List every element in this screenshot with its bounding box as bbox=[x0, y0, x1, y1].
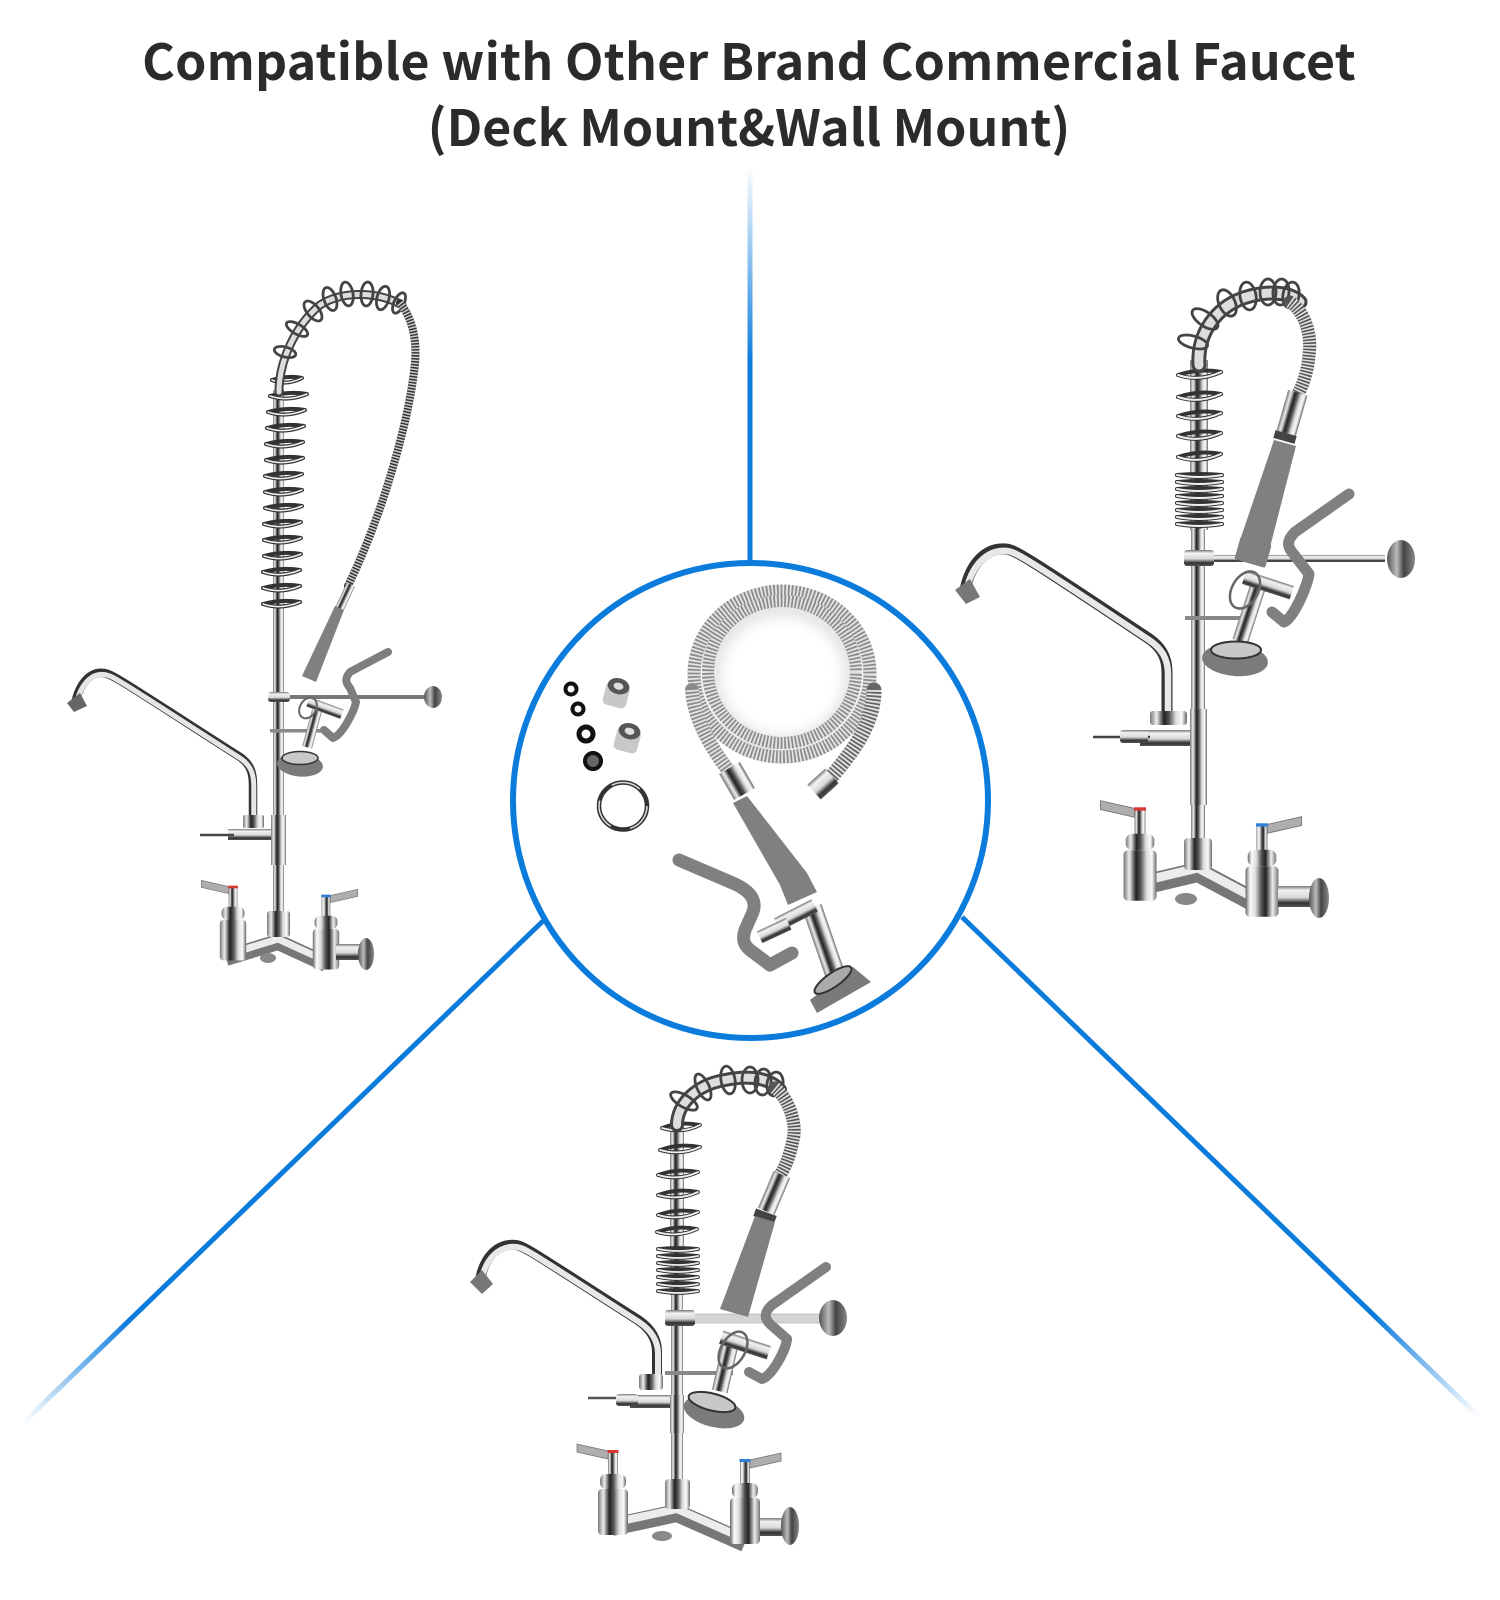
connector line: top bbox=[748, 166, 752, 563]
riser clamp bbox=[665, 1310, 695, 1326]
wall fitting bbox=[760, 1518, 786, 1536]
mount nub bbox=[260, 953, 276, 963]
mount nub bbox=[1175, 893, 1197, 905]
metal ring bbox=[599, 782, 647, 830]
upper arc with coils bbox=[273, 281, 408, 392]
lower riser bbox=[1191, 529, 1205, 841]
spout bbox=[965, 549, 1168, 714]
grip collar bbox=[1234, 536, 1272, 568]
spray disc chrome bbox=[1211, 642, 1261, 658]
left valve bbox=[201, 880, 246, 960]
head cross piece bbox=[774, 899, 818, 931]
hose connector bbox=[1277, 390, 1307, 436]
riser sleeve bbox=[271, 815, 286, 865]
wall rod bbox=[270, 695, 425, 699]
coiled hose bbox=[692, 591, 874, 776]
spring coils bbox=[657, 1124, 700, 1293]
grey grip bbox=[1238, 440, 1296, 555]
riser pipe bbox=[1190, 360, 1208, 530]
wall flange bbox=[1387, 540, 1415, 578]
riser pipe bbox=[670, 1120, 684, 1295]
right valve bbox=[1246, 817, 1302, 917]
hook bracket bbox=[665, 1371, 733, 1375]
head ring bbox=[1224, 566, 1266, 614]
filter washer bbox=[585, 753, 601, 769]
right valve bbox=[730, 1453, 781, 1544]
spray disc grey bbox=[1201, 641, 1269, 679]
wall rod bbox=[680, 1314, 825, 1323]
centre collar bbox=[267, 911, 290, 937]
head ring bbox=[296, 694, 320, 722]
spray head body bbox=[803, 904, 847, 986]
grey grip bbox=[302, 606, 344, 682]
hose shadow bbox=[712, 608, 852, 744]
hose connector bbox=[719, 762, 755, 800]
rubber washer 2 bbox=[572, 704, 584, 714]
valve stem bbox=[616, 1394, 638, 1406]
manifold bbox=[226, 939, 326, 964]
manifold bbox=[1130, 868, 1262, 906]
needle valve bbox=[200, 834, 234, 836]
spray head body bbox=[302, 709, 322, 749]
riser clamp bbox=[1184, 550, 1214, 566]
center circle bbox=[513, 563, 988, 1038]
wall disc bbox=[1309, 878, 1329, 918]
rubber washer 1 bbox=[566, 684, 576, 694]
aerator bbox=[955, 579, 980, 604]
centre collar bbox=[665, 1479, 690, 1509]
connector ring bbox=[1273, 430, 1297, 444]
wall flange bbox=[424, 686, 442, 708]
spray disc dome bbox=[811, 962, 855, 998]
nozzle bbox=[1242, 571, 1294, 599]
lever bbox=[324, 652, 388, 738]
right valve bbox=[313, 889, 358, 969]
nozzle bbox=[719, 1331, 771, 1359]
title bbox=[142, 23, 1356, 161]
upper arc with coils bbox=[1177, 278, 1301, 365]
riser pipe bbox=[273, 390, 284, 913]
spout bbox=[76, 673, 254, 818]
spray disc grey bbox=[680, 1390, 748, 1434]
hose connector bbox=[335, 582, 355, 612]
riser sleeve bbox=[1190, 709, 1207, 805]
nozzle bbox=[757, 918, 791, 943]
nozzle bbox=[306, 697, 344, 719]
nut 2 bbox=[613, 720, 643, 755]
left faucet bbox=[67, 281, 442, 970]
riser clamp bbox=[268, 692, 290, 702]
spring coils bbox=[263, 377, 307, 607]
aerator bbox=[67, 693, 87, 712]
title: (Deck Mount&Wall Mount) bbox=[428, 89, 1070, 161]
spout collar bbox=[1150, 711, 1187, 725]
riser sleeve bbox=[670, 1395, 684, 1433]
nut 1 bbox=[602, 675, 632, 710]
flexible hose bbox=[348, 303, 415, 586]
spray head body bbox=[1233, 578, 1267, 644]
flexible hose bbox=[775, 1088, 794, 1175]
rubber washer 3 bbox=[579, 727, 593, 741]
right faucet bbox=[955, 278, 1415, 918]
spray disc grey bbox=[276, 752, 324, 778]
connector line: lower right bbox=[962, 917, 1478, 1416]
spout collar bbox=[639, 1374, 663, 1390]
bottom faucet bbox=[470, 1065, 847, 1545]
upper arc with coils bbox=[668, 1065, 785, 1125]
connector ring bbox=[753, 1208, 777, 1224]
wall flange bbox=[819, 1300, 847, 1336]
wall fitting bbox=[1278, 886, 1316, 907]
grey grip bbox=[733, 796, 817, 905]
head ring bbox=[713, 1327, 753, 1373]
spray disc chrome bbox=[282, 752, 318, 764]
grey grip bbox=[720, 1216, 775, 1317]
hose end fitting bbox=[807, 769, 839, 799]
connector line: lower left bbox=[24, 921, 543, 1422]
tee bbox=[630, 1395, 682, 1408]
centre collar bbox=[1184, 838, 1212, 870]
spray head body bbox=[712, 1335, 740, 1393]
needle valve bbox=[588, 1397, 625, 1399]
hook bracket bbox=[1185, 616, 1240, 620]
flexible hose bbox=[1290, 302, 1310, 394]
accessory kit bbox=[566, 591, 874, 1013]
tee bbox=[1140, 730, 1206, 746]
spout bbox=[480, 1245, 658, 1378]
title: Compatible with Other Brand Commercial Faucet bbox=[142, 23, 1356, 95]
lever bbox=[1272, 494, 1349, 622]
aerator bbox=[470, 1270, 493, 1294]
lever bbox=[679, 860, 792, 965]
wall fitting bbox=[336, 944, 364, 960]
left valve bbox=[1100, 801, 1156, 901]
wall rod bbox=[1195, 555, 1385, 562]
lower riser bbox=[671, 1293, 683, 1479]
tee bbox=[228, 829, 284, 840]
spray disc rim bbox=[810, 967, 871, 1013]
spring coils bbox=[1177, 371, 1222, 526]
spout collar bbox=[243, 815, 264, 828]
spray disc chrome bbox=[687, 1388, 737, 1416]
wall disc bbox=[358, 938, 374, 970]
lever bbox=[749, 1267, 826, 1379]
left valve bbox=[577, 1444, 628, 1535]
mount nub bbox=[652, 1531, 672, 1541]
manifold bbox=[612, 1509, 745, 1543]
hook bracket bbox=[270, 729, 322, 732]
hose connector bbox=[758, 1171, 790, 1215]
valve stem bbox=[1120, 730, 1148, 743]
wall disc bbox=[781, 1507, 799, 1545]
needle valve bbox=[1093, 736, 1150, 738]
